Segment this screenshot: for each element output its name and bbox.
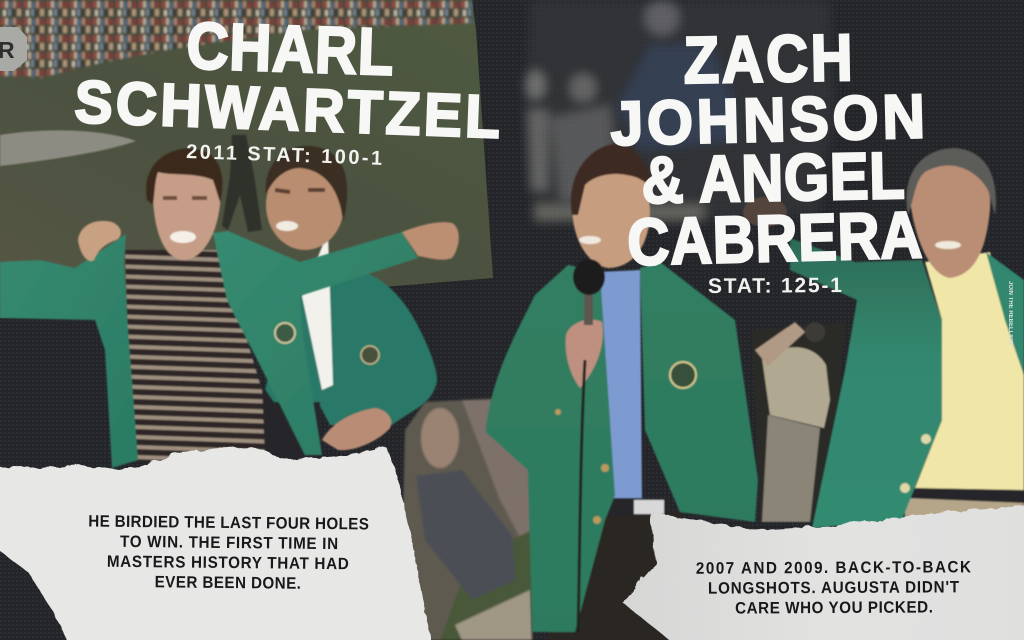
crest	[670, 362, 696, 388]
striped shirt	[125, 250, 268, 462]
hand	[566, 320, 603, 388]
title: Zach Johnson and Angel Cabrera: & ANGEL	[641, 140, 905, 218]
microphone	[573, 259, 605, 632]
sand bunker	[0, 130, 136, 166]
stat: 2011 odds: 2011 STAT: 100-1	[186, 141, 382, 170]
eyes	[163, 196, 207, 200]
figure: Angel Cabrera	[743, 148, 1024, 528]
belt	[606, 498, 668, 516]
note text	[696, 559, 972, 618]
buttons	[555, 409, 609, 524]
trousers	[260, 402, 322, 462]
background golfer, swinging	[752, 322, 845, 522]
figure: Phil Mickelson	[260, 146, 437, 462]
shirt	[598, 270, 642, 500]
jacket right side and sleeve	[213, 231, 418, 455]
shirt	[302, 232, 333, 390]
title: Zach Johnson and Angel Cabrera: JOHNSON	[610, 81, 926, 158]
title: Zach Johnson and Angel Cabrera	[610, 22, 926, 280]
figure: Charl Schwartzel	[0, 148, 459, 468]
note text: TO WIN. THE FIRST TIME IN	[120, 533, 338, 553]
note text: EVER BEEN DONE.	[155, 574, 301, 593]
neck and face	[152, 162, 220, 260]
hand	[322, 408, 391, 450]
note text: 2007 AND 2009. BACK-TO-BACK	[696, 559, 972, 578]
title: Zach Johnson and Angel Cabrera: CABRERA	[626, 199, 923, 280]
fist	[402, 222, 459, 260]
note text: HE BIRDIED THE LAST FOUR HOLES	[88, 513, 369, 534]
jacket right	[640, 262, 758, 522]
jacket left	[486, 265, 615, 632]
smile	[579, 236, 601, 244]
note text: LONGSHOTS. AUGUSTA DIDN'T	[708, 579, 959, 598]
face	[266, 160, 344, 250]
title: Zach Johnson and Angel Cabrera: ZACH	[683, 22, 853, 98]
distant golfer	[222, 135, 262, 232]
dark shadow at shirt hem	[262, 385, 310, 462]
buttons	[900, 434, 931, 493]
belt	[905, 488, 1024, 503]
paper: left torn note	[0, 447, 432, 640]
background golfer, bending	[400, 398, 532, 640]
crest	[275, 323, 295, 343]
trousers	[905, 490, 1024, 525]
smile	[276, 221, 298, 231]
note text: CARE WHO YOU PICKED.	[735, 599, 933, 618]
face	[910, 160, 990, 278]
crowd	[0, 0, 472, 78]
raised hand	[743, 197, 787, 227]
jacket left side with sleeve	[0, 234, 138, 468]
hair	[266, 146, 347, 222]
crest	[361, 346, 379, 364]
figure: Zach Johnson	[486, 144, 758, 640]
hair	[146, 148, 223, 205]
jacket	[262, 268, 437, 425]
trousers	[545, 510, 690, 640]
eyes	[275, 190, 325, 192]
presenter hand	[78, 221, 121, 261]
jacket right	[986, 252, 1024, 375]
panel: left golf course photo	[0, 0, 493, 318]
title: Charl Schwartzel: SCHWARTZEL	[74, 69, 501, 151]
hair	[906, 148, 996, 215]
title: Charl Schwartzel: CHARL	[186, 10, 395, 90]
smile	[935, 241, 961, 249]
shirt	[915, 252, 1024, 490]
stat: combined odds: STAT: 125-1	[708, 274, 842, 298]
paper: right torn note	[622, 505, 1024, 640]
vertical credit: JOIN THE REBELLION	[1007, 281, 1013, 345]
hair	[571, 144, 650, 215]
smile	[170, 231, 196, 243]
title: Charl Schwartzel	[74, 10, 501, 151]
jacket left	[790, 238, 942, 528]
logo badge	[0, 27, 27, 71]
note text	[88, 513, 369, 594]
panel: right crowd photo	[525, 0, 835, 222]
face	[572, 160, 650, 268]
note text: MASTERS HISTORY THAT HAD	[107, 553, 349, 573]
